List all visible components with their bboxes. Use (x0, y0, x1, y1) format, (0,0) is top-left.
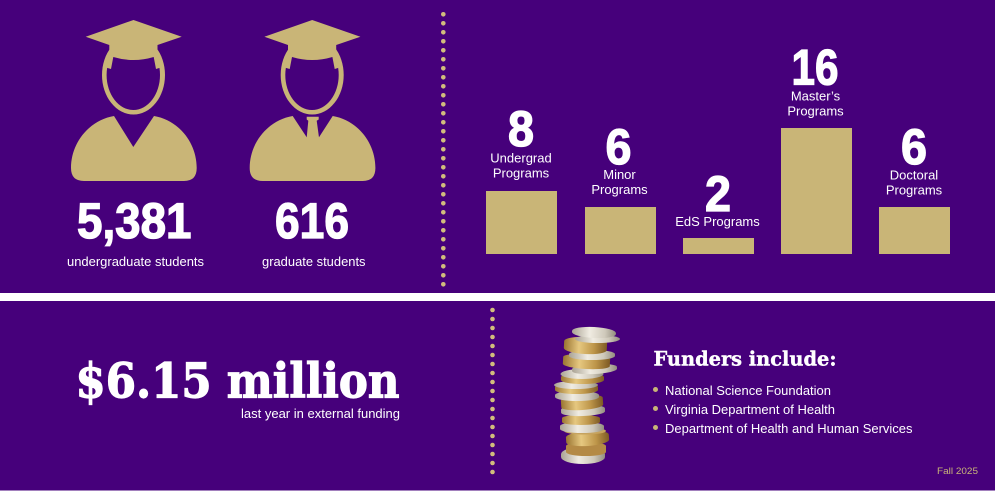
bar: doctoral programs: Doctoral (890, 168, 938, 182)
icon: undergraduate student (71, 20, 197, 181)
stat: graduate students number: 616 (275, 193, 349, 249)
bar: minor programs: 6 (606, 119, 632, 175)
divider: vertical dots top (441, 12, 446, 287)
stat: external funding amount: $6.15 million (76, 354, 400, 410)
bar: minor programs: Programs (591, 182, 648, 197)
bar: master's programs (781, 40, 852, 254)
footnote: date: Fall 2025 (937, 466, 978, 477)
label: graduate students: graduate students (262, 254, 366, 269)
heading: funders include: Funders include: (654, 346, 836, 370)
bar: doctoral programs (879, 119, 950, 254)
bar: minor programs (585, 119, 656, 254)
bar: undergrad programs (486, 101, 557, 254)
bar: master's programs: Master’s (791, 88, 841, 104)
panel: student counts (67, 20, 375, 269)
bar: undergrad programs: Programs (493, 166, 550, 180)
divider: vertical dots bottom (490, 308, 495, 474)
bar: master's programs: Programs (787, 104, 844, 118)
bar: EdS programs: 2 (705, 166, 731, 222)
bar: EdS programs: EdS Programs (675, 214, 760, 229)
icon: graduate student (250, 20, 375, 181)
bar: EdS programs (675, 166, 760, 254)
bar: undergrad programs: 8 (508, 101, 534, 157)
bar chart: programs offered (486, 40, 950, 254)
list: funders (653, 383, 913, 436)
bar: doctoral programs: 6 (901, 119, 927, 175)
list: funders: Department of Health and Human Services (665, 421, 913, 436)
icon: stack of coins (554, 326, 620, 464)
list: funders: Virginia Department of Health (665, 402, 835, 417)
label: external funding: last year in external funding (241, 406, 400, 421)
list: funders: National Science Foundation (665, 383, 831, 398)
bar: undergrad programs: Undergrad (490, 150, 552, 166)
stat: undergraduate students number: 5,381 (77, 193, 192, 249)
bar: minor programs: Minor (603, 167, 636, 182)
label: undergraduate students: undergraduate students (67, 254, 204, 269)
bar: doctoral programs: Programs (886, 182, 943, 198)
bar: master's programs: 16 (792, 40, 838, 96)
